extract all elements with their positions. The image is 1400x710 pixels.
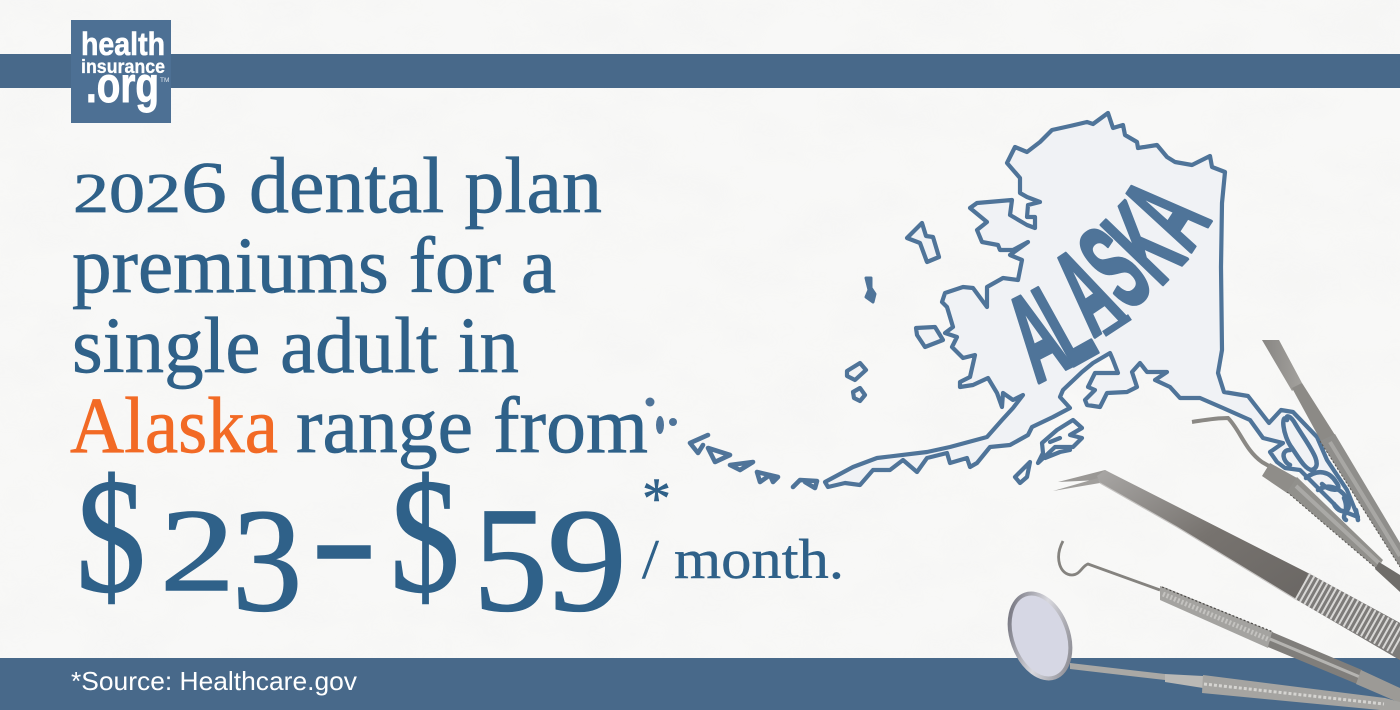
logo: healthinsurance.org: .org <box>86 57 159 113</box>
instrument: hook probe <box>1059 541 1400 703</box>
logo: healthinsurance.org <box>71 20 171 123</box>
headline: range from <box>296 383 648 470</box>
dental instruments <box>999 340 1400 710</box>
price range: $ <box>390 444 460 627</box>
state name lettering: S <box>1056 203 1174 333</box>
price range: $ <box>76 444 146 627</box>
logo: healthinsurance.org: TM <box>160 77 169 84</box>
headline: 6 <box>181 147 227 228</box>
state name lettering: A <box>1031 224 1142 361</box>
per month label: / month. <box>642 529 844 591</box>
headline: premiums for a <box>72 223 556 310</box>
instrument: tweezers <box>1053 470 1400 660</box>
headline <box>70 143 648 470</box>
map of Alaska <box>646 113 1358 520</box>
islands: Pribilofs <box>847 363 866 401</box>
bottom bar <box>0 658 1400 710</box>
price range: 3 <box>232 479 302 643</box>
island: St Matthew <box>866 278 875 302</box>
source note: *Source: Healthcare.gov <box>71 666 357 696</box>
island: St Lawrence <box>907 223 939 262</box>
state name lettering: A <box>987 267 1086 408</box>
headline: Alaska <box>70 383 278 470</box>
state name lettering: K <box>1080 181 1208 306</box>
headline: 202 <box>73 163 181 225</box>
price range <box>76 375 627 674</box>
logo: healthinsurance.org: insurance <box>81 56 165 78</box>
instrument: curved explorer <box>1192 418 1400 592</box>
logo: healthinsurance.org: health <box>81 26 165 62</box>
price range: 2 <box>160 486 235 616</box>
price range: – <box>317 375 371 674</box>
panhandle islands <box>1283 416 1358 520</box>
state name lettering: L <box>1016 255 1113 392</box>
asterisk: * <box>642 466 671 531</box>
islands: Aleutians <box>646 398 817 488</box>
price range: 9 <box>547 479 627 643</box>
state name lettering <box>987 159 1235 408</box>
instrument: dental mirror <box>999 585 1400 710</box>
top bar <box>0 54 1400 88</box>
instrument: spatula <box>1262 340 1400 567</box>
headline: single adult in <box>72 303 519 390</box>
state name lettering: A <box>1097 159 1235 268</box>
headline: dental plan <box>249 143 602 230</box>
price range: 5 <box>473 477 548 643</box>
island: Nunivak <box>916 327 943 347</box>
islands: Kodiak group <box>1015 420 1082 483</box>
mainland outline <box>825 113 1358 517</box>
